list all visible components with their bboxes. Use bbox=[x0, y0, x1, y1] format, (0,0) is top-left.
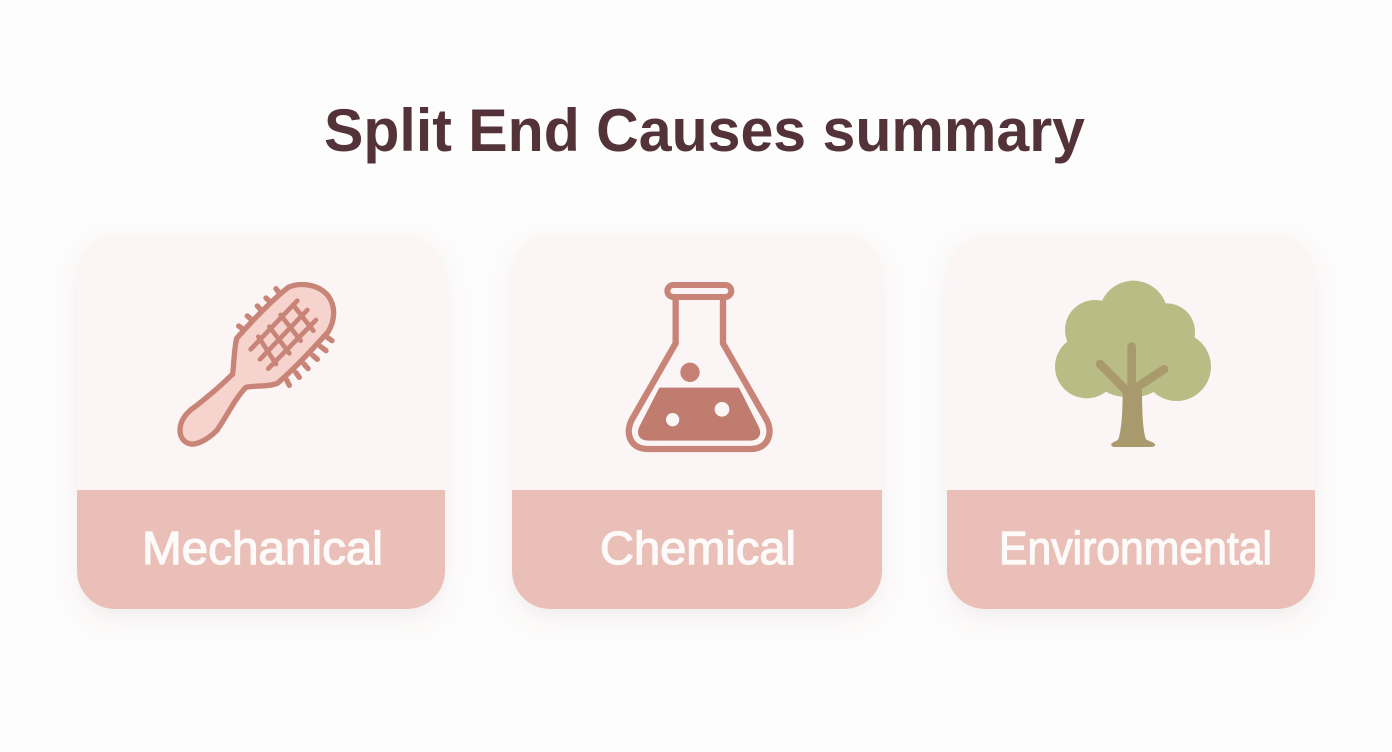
icon: tree bbox=[1055, 281, 1211, 447]
title: Split End Causes summary bbox=[324, 97, 1086, 164]
label: environmental: Environmental bbox=[999, 522, 1272, 574]
panel: environmental bbox=[947, 235, 1315, 609]
label band: chemical bbox=[512, 490, 882, 609]
icon: flask bbox=[629, 285, 770, 449]
label band: mechanical bbox=[77, 490, 445, 609]
label: chemical: Chemical bbox=[600, 522, 796, 574]
icon: hairbrush bbox=[180, 285, 334, 444]
panel: chemical bbox=[512, 235, 882, 609]
panel: mechanical bbox=[77, 235, 445, 609]
label band: environmental bbox=[947, 490, 1315, 609]
label: mechanical: Mechanical bbox=[142, 522, 383, 574]
